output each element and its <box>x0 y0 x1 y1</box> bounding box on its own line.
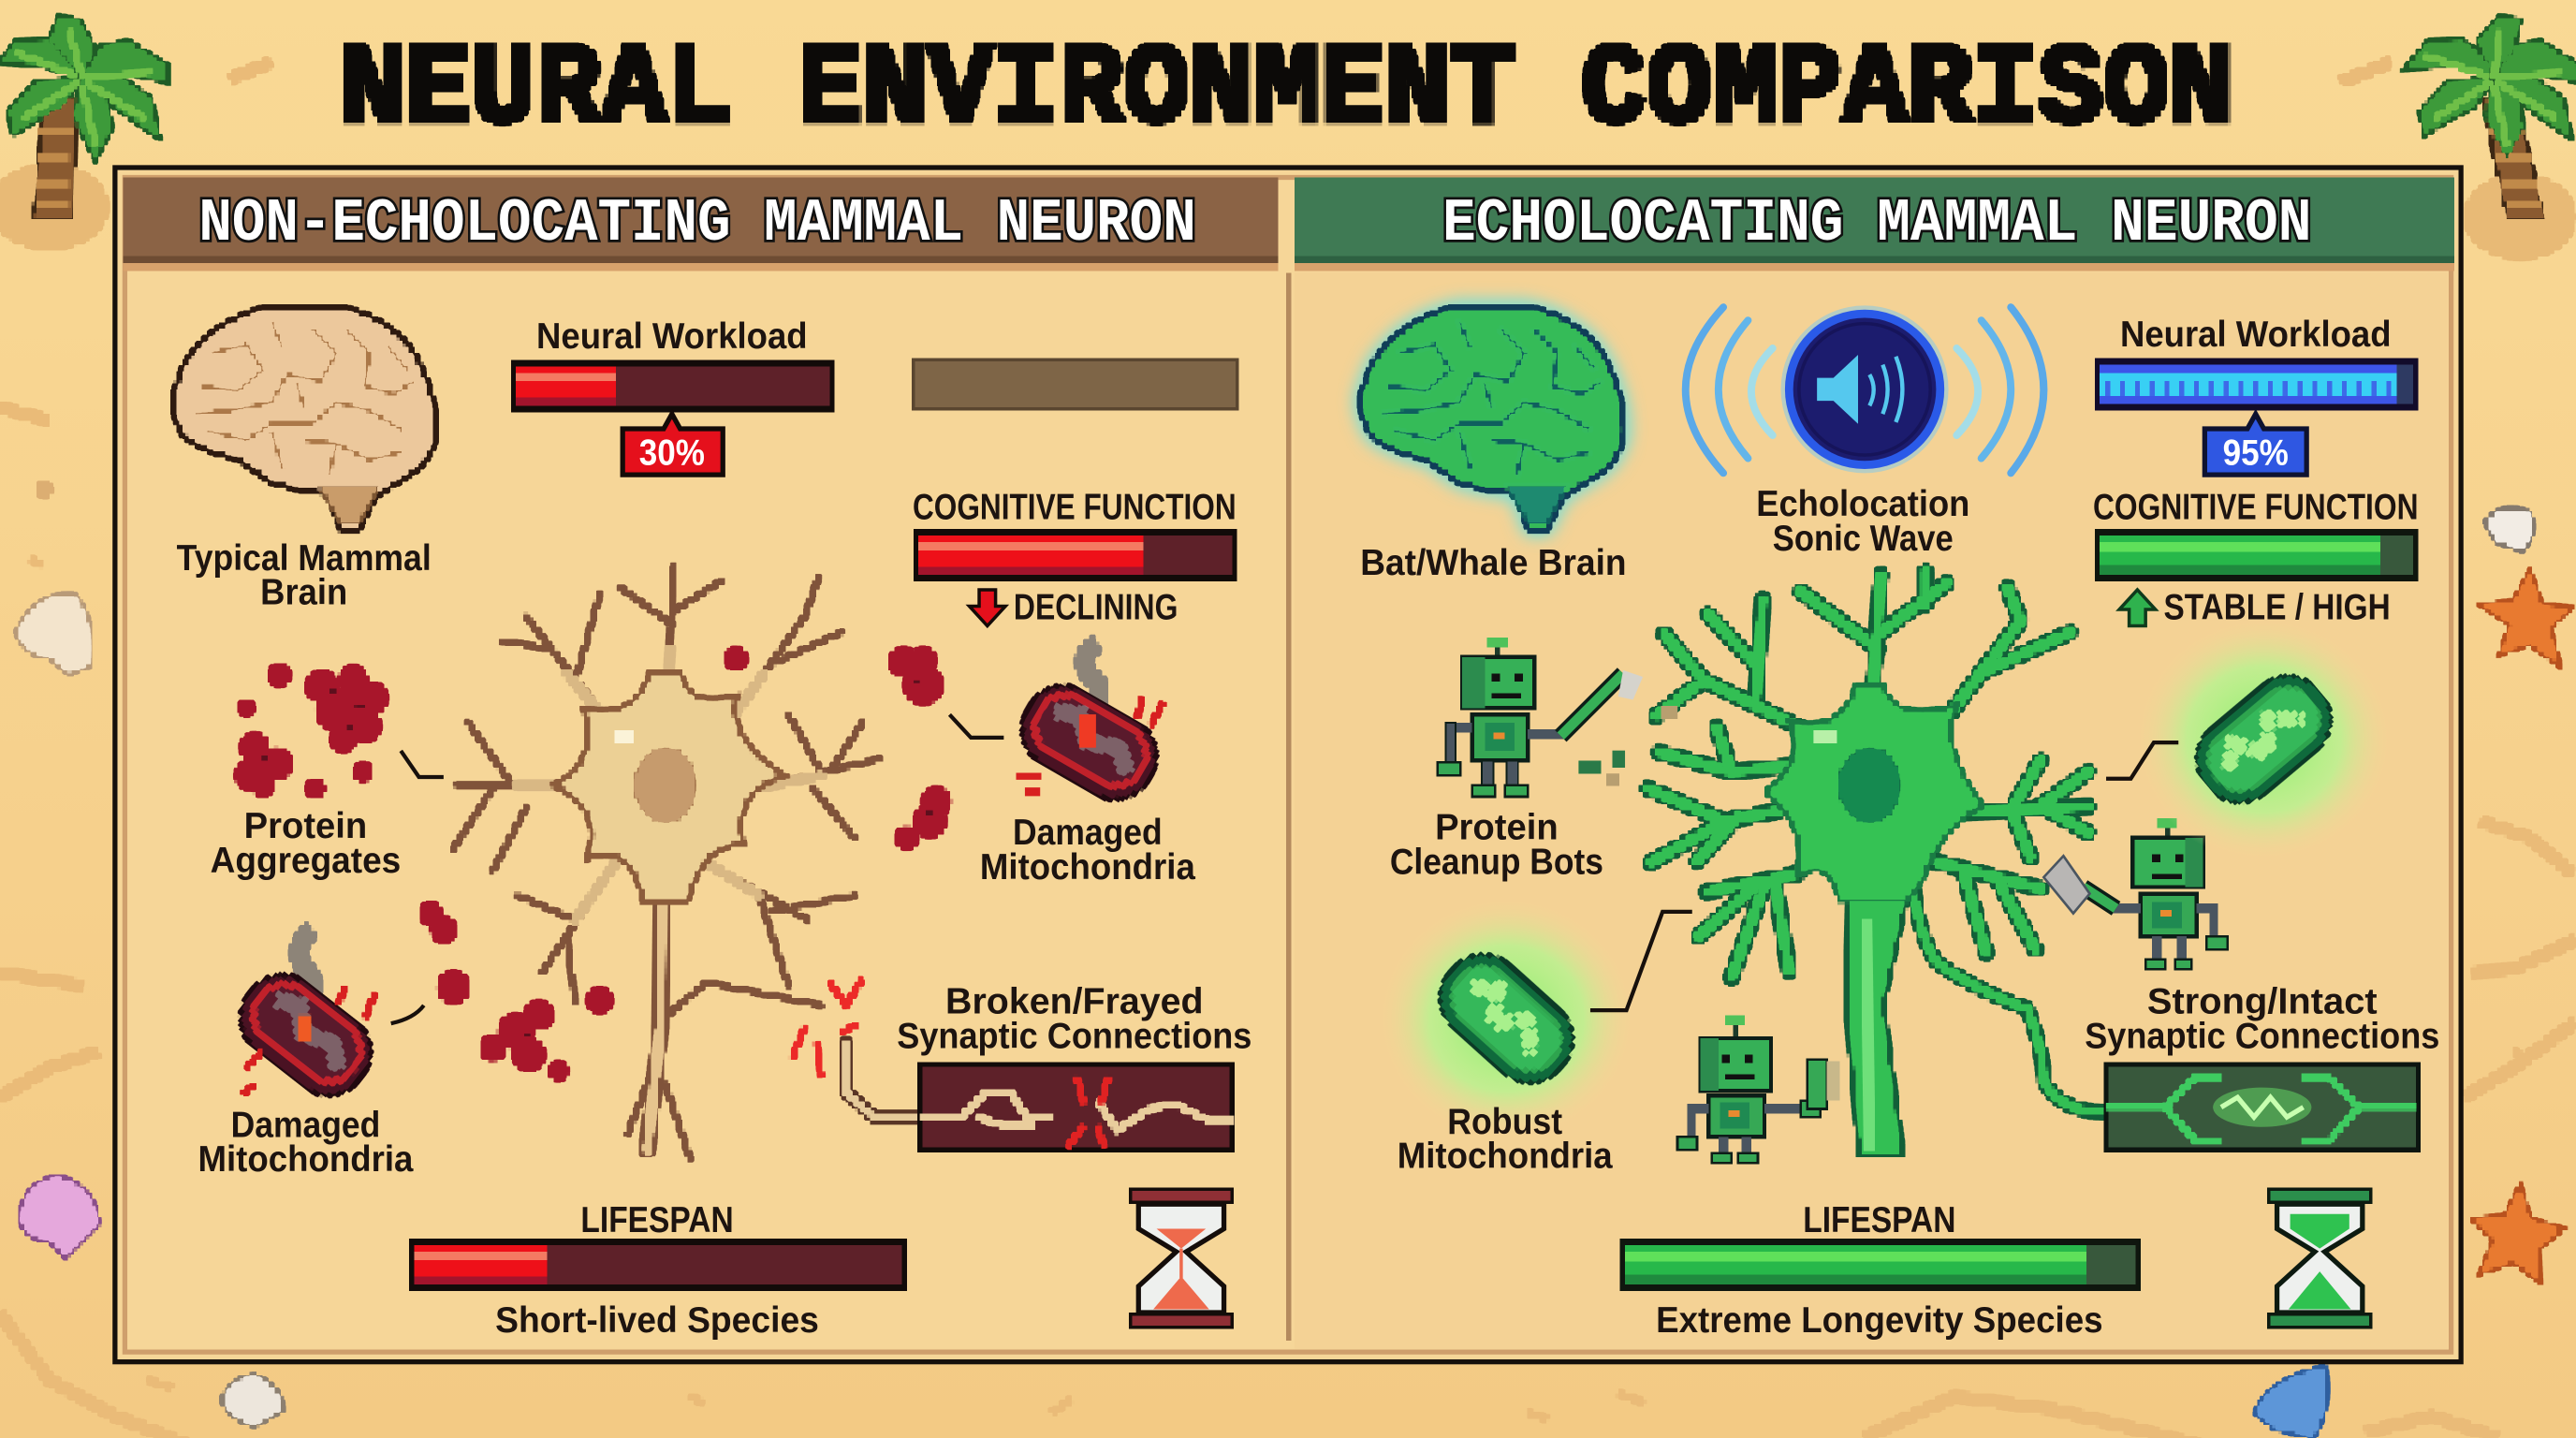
label: strong intact synaptic connections: Strong/Intact <box>2147 982 2378 1022</box>
label: damaged mitochondria left: Damaged <box>231 1105 380 1145</box>
dendrites and axon <box>452 566 920 1158</box>
panel header left: NON-ECHOLOCATING MAMMAL NEURON <box>198 190 1196 258</box>
label: neural workload right: Neural Workload <box>2120 315 2392 355</box>
label: broken frayed synaptic connections <box>897 982 1251 1057</box>
label: damaged mitochondria left: Mitochondria <box>198 1139 414 1180</box>
panel header right <box>1295 178 2454 271</box>
label: stable high: STABLE / HIGH <box>2163 588 2391 628</box>
panel: non-echolocating mammal neuron <box>124 178 1278 1341</box>
tag: 95% <box>2204 414 2306 475</box>
label: typical mammal brain: Brain <box>260 573 347 613</box>
label: strong intact synaptic connections <box>2085 982 2439 1057</box>
icon: robust mitochondria right <box>2136 618 2392 860</box>
shell: cream left <box>17 594 92 673</box>
tag: 95%: 95% <box>2223 433 2289 474</box>
label: protein aggregates: Protein <box>244 806 367 846</box>
leader: aggregates <box>401 751 444 777</box>
icon: robust mitochondria left <box>1379 897 1634 1140</box>
starfish lower right <box>2472 1186 2563 1282</box>
icon: hourglass green <box>2269 1189 2371 1328</box>
label: broken frayed synaptic connections: Synaptic Connections <box>897 1017 1251 1057</box>
label: damaged mitochondria right: Damaged <box>1013 813 1163 853</box>
icon: typical mammal brain <box>173 307 435 529</box>
leader: damaged mitochondria right <box>949 714 1003 738</box>
label: lifespan: LIFESPAN <box>580 1200 734 1240</box>
robot: cleanup bot lower <box>1677 1015 1840 1163</box>
debris: protein fragments <box>1580 707 1676 785</box>
leader: robust mitochondria right <box>2106 742 2178 779</box>
label: cognitive function right: COGNITIVE FUNCTION <box>2093 487 2419 527</box>
label: extreme longevity species: Extreme Longevity Species <box>1656 1300 2103 1341</box>
leader: robust mitochondria left <box>1590 912 1692 1010</box>
panel header right: ECHOLOCATING MAMMAL NEURON <box>1442 190 2311 258</box>
label: strong intact synaptic connections: Synaptic Connections <box>2085 1017 2439 1057</box>
bar: neural workload 95% <box>2095 359 2419 411</box>
sparks: broken synapse <box>792 979 862 1076</box>
inset: broken synapse <box>920 1064 1232 1150</box>
icon: echolocation sonic wave <box>1686 305 2043 473</box>
palm tree left <box>0 17 168 250</box>
starfish upper right <box>2481 572 2571 666</box>
label: cognitive function: COGNITIVE FUNCTION <box>913 487 1237 527</box>
bar: neural workload 30% <box>511 360 835 412</box>
icon: hourglass red <box>1131 1189 1232 1328</box>
comparison frame <box>115 168 2461 1362</box>
label: damaged mitochondria left <box>198 1105 414 1180</box>
soma <box>555 673 782 901</box>
icon: declining arrow <box>970 590 1005 626</box>
free protein fragments <box>419 647 951 1081</box>
panel: echolocating mammal neuron <box>1295 178 2454 1341</box>
label: bat whale brain: Bat/Whale Brain <box>1360 543 1627 583</box>
label: echolocation sonic wave: Sonic Wave <box>1773 519 1954 559</box>
label: damaged mitochondria right: Mitochondria <box>980 847 1195 888</box>
inset: strong synapse <box>2106 1064 2419 1150</box>
label: short-lived species: Short-lived Species <box>495 1300 819 1341</box>
neuron: healthy <box>1647 572 2110 1155</box>
bar: cognitive function stable <box>2095 529 2419 581</box>
label: damaged mitochondria right <box>980 813 1195 888</box>
label: broken frayed synaptic connections: Broken/Frayed <box>945 982 1204 1022</box>
label: echolocation sonic wave <box>1756 484 1969 559</box>
label: typical mammal brain: Typical Mammal <box>177 538 432 579</box>
label: protein cleanup bots: Cleanup Bots <box>1390 843 1603 883</box>
icon: bat whale brain <box>1361 307 1623 529</box>
label: robust mitochondria <box>1398 1102 1613 1177</box>
bar: cognitive function declining <box>914 529 1237 581</box>
label: declining: DECLINING <box>1014 588 1178 628</box>
label: neural workload: Neural Workload <box>536 316 808 357</box>
divider <box>1286 272 1292 1341</box>
label: typical mammal brain <box>177 538 432 613</box>
tag: 30%: 30% <box>639 433 705 474</box>
leader: damaged mitochondria left <box>391 1005 424 1023</box>
icon: rising arrow <box>2119 590 2156 626</box>
dendrites fill <box>1647 572 2110 1112</box>
label: protein aggregates <box>211 806 401 881</box>
label: protein cleanup bots: Protein <box>1435 808 1559 848</box>
label: robust mitochondria: Mitochondria <box>1398 1137 1613 1177</box>
icon: damaged mitochondria left <box>226 930 386 1109</box>
title: NEURAL ENVIRONMENT COMPARISON <box>340 26 2234 156</box>
label: protein cleanup bots <box>1390 808 1603 883</box>
palm tree right <box>2405 17 2576 259</box>
label: echolocation sonic wave: Echolocation <box>1756 484 1969 524</box>
soma and axon <box>1766 686 1982 1155</box>
shell: blue bottom <box>2256 1367 2327 1437</box>
speaker disc <box>1781 305 1949 473</box>
label: protein aggregates: Aggregates <box>211 841 401 881</box>
shell: white right <box>2485 508 2533 550</box>
robot: cleanup bot top <box>1438 638 1643 797</box>
tag: 30% <box>622 414 723 475</box>
sound arcs <box>1686 307 2043 473</box>
shell: white bottom <box>222 1375 283 1426</box>
icon: damaged mitochondria right <box>1009 644 1169 813</box>
robot: cleanup bot right <box>2043 818 2228 969</box>
label: robust mitochondria: Robust <box>1447 1102 1562 1142</box>
protein aggregates cluster <box>235 664 388 799</box>
neuron: degraded <box>452 566 920 1158</box>
panel header left <box>124 178 1278 271</box>
bar: lifespan short <box>409 1239 907 1291</box>
bar: lifespan extreme <box>1620 1239 2141 1291</box>
dendrites outline <box>1647 572 2110 1112</box>
shell: pink left <box>20 1176 98 1256</box>
empty bar <box>914 360 1237 409</box>
label: lifespan right: LIFESPAN <box>1803 1200 1955 1240</box>
